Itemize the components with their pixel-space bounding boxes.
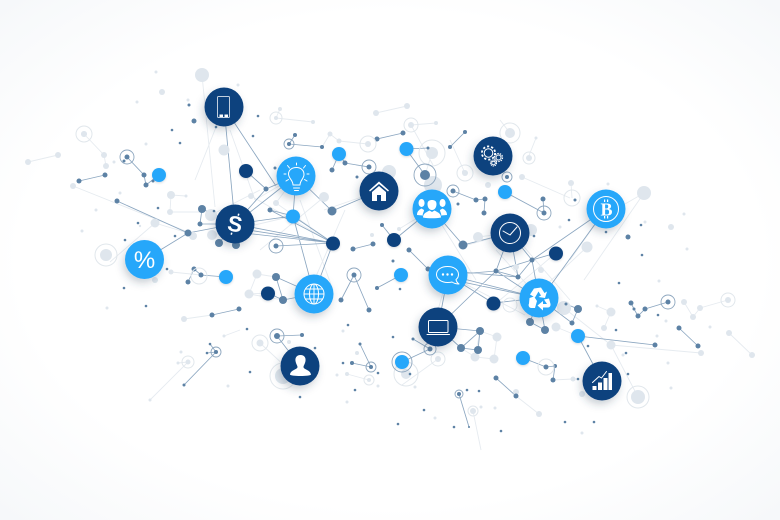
icon: clock: [490, 214, 530, 252]
icon: gears: [474, 136, 512, 176]
icon: house: [360, 172, 398, 210]
gray ring nodes: [120, 139, 675, 398]
pale dots: [25, 68, 755, 434]
icon: percent: %: [134, 247, 155, 274]
icon: bitcoin: [586, 190, 626, 228]
icon: bar chart: [582, 362, 622, 400]
icon: percent: [125, 240, 164, 279]
icon: speech bubble: [428, 256, 468, 294]
icon: dollar: [216, 204, 254, 244]
icon: people: [412, 190, 452, 228]
icon: bitcoin: B: [600, 200, 613, 220]
icon: globe: [294, 274, 334, 314]
small navy nodes: [239, 164, 563, 310]
mid-blue dots: [76, 104, 700, 432]
ring centre dots: [81, 116, 731, 414]
small bright blue nodes: [152, 142, 585, 369]
pale ring nodes: [76, 112, 735, 416]
icon: user: [280, 346, 320, 386]
icon: phone: [204, 88, 244, 126]
dark network links: [79, 107, 698, 427]
icon: recycle: [520, 278, 558, 318]
icon: laptop: [418, 308, 458, 346]
pale network links: [28, 75, 752, 450]
icon: light bulb: [276, 156, 316, 196]
icon: dollar: S: [226, 210, 244, 238]
